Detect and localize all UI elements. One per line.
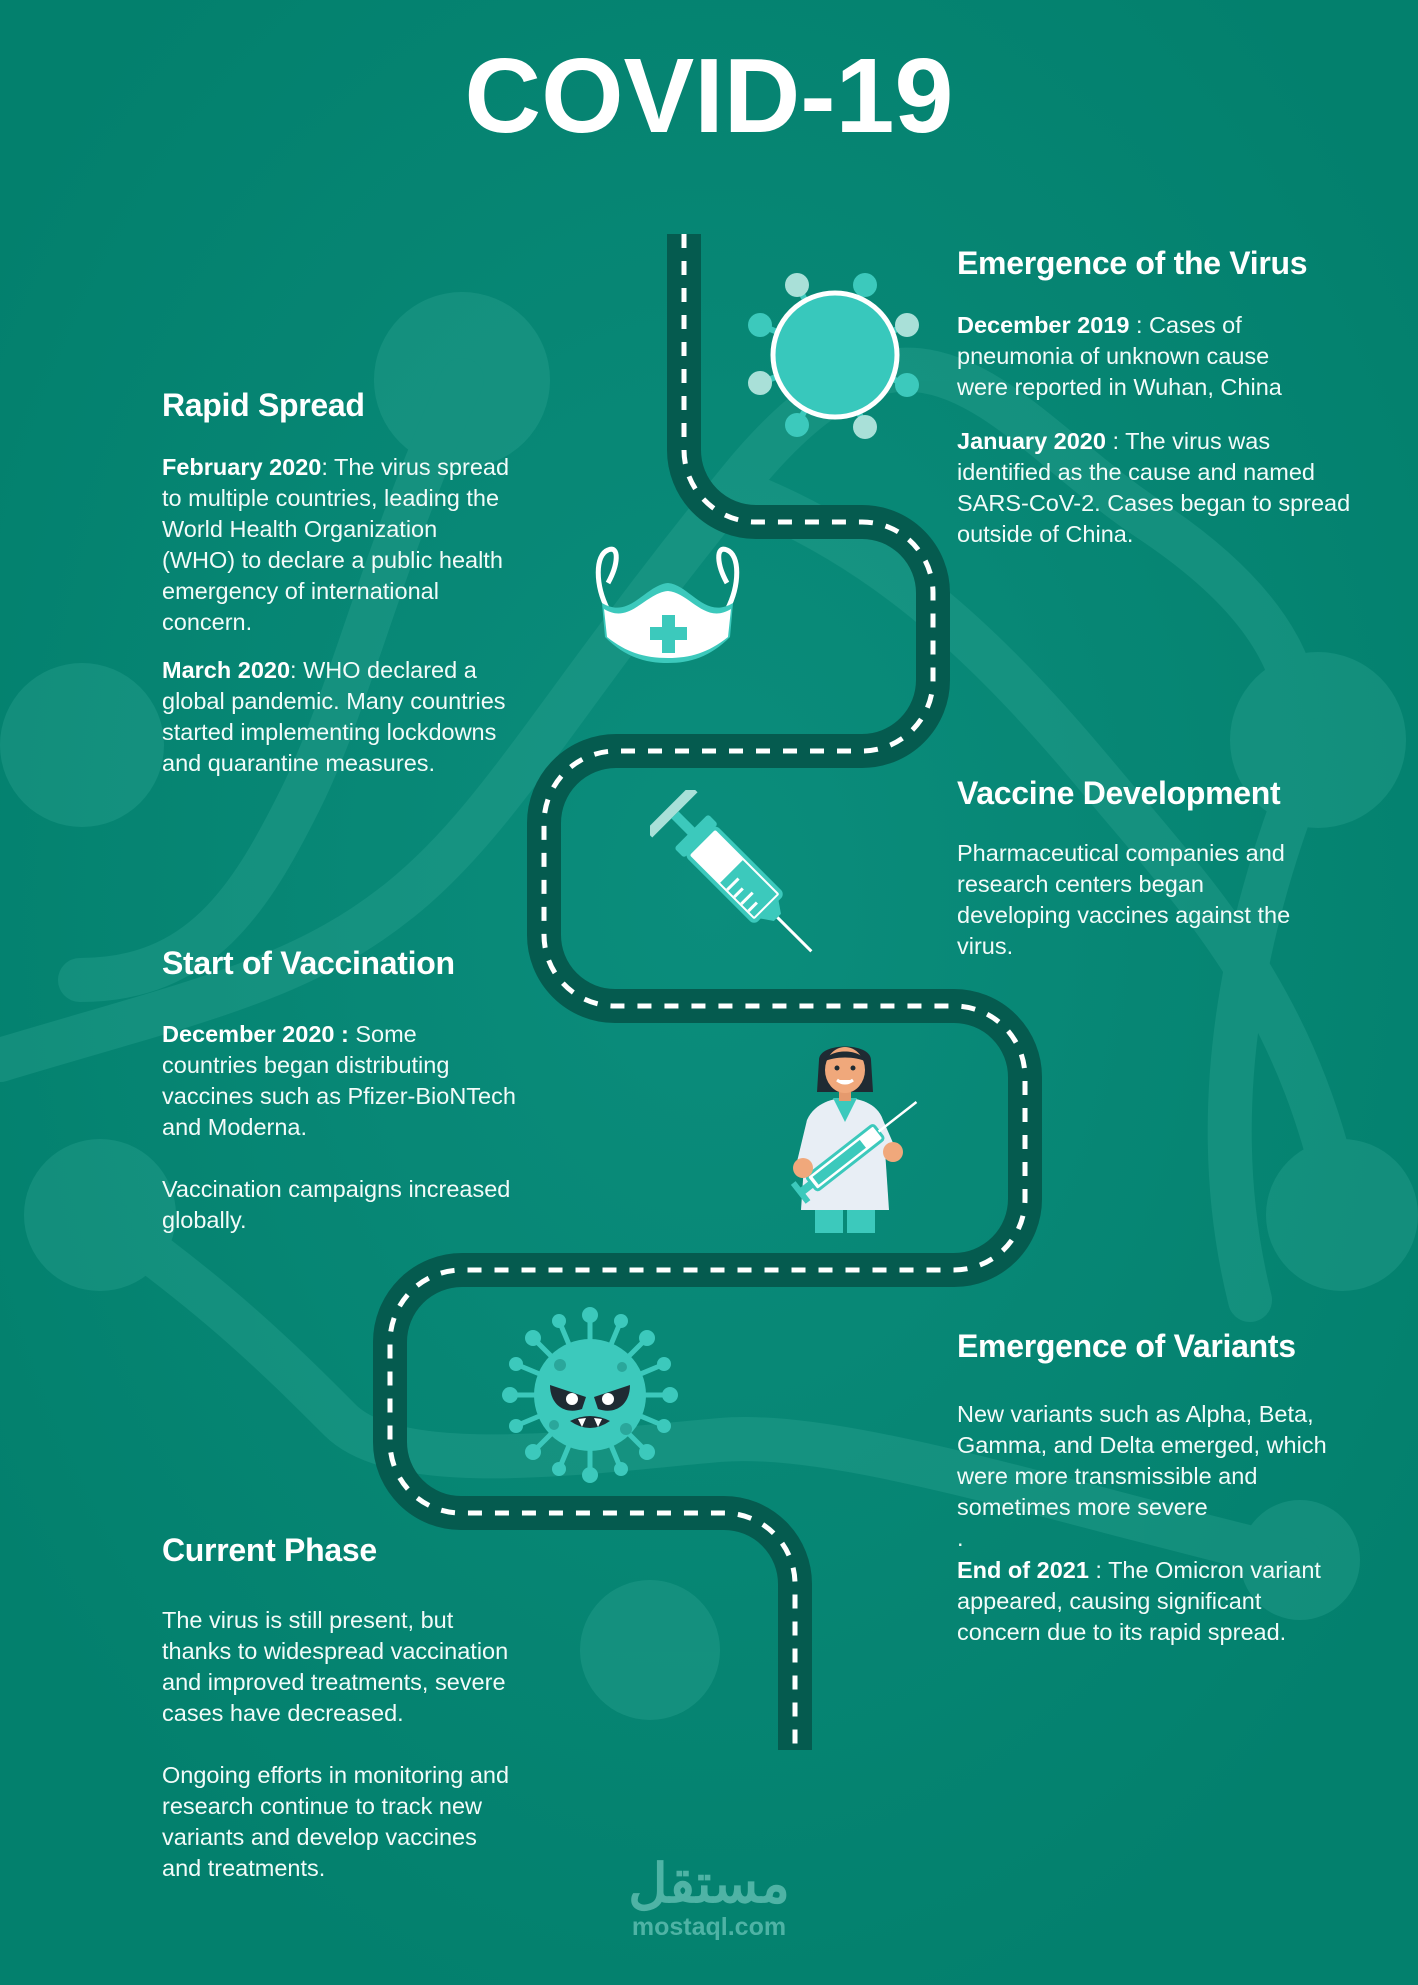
text: End of 2021 <box>957 1557 1321 1645</box>
icon: mask <box>596 546 740 663</box>
text: vaccine development: Pharmaceutical companies and <box>957 840 1285 866</box>
text: current phase: cases have decreased. <box>162 1700 404 1726</box>
text: current phase: thanks to widespread vaccination <box>162 1638 508 1664</box>
text: January 2020: outside of China. <box>957 521 1133 547</box>
text: February 2020: February 2020: The virus spread <box>162 454 509 480</box>
heading: Start of Vaccination: Start of Vaccination <box>162 945 455 981</box>
text: vaccine development <box>957 840 1290 959</box>
text: vaccine development: virus. <box>957 933 1013 959</box>
text: February 2020: emergency of international <box>162 578 439 604</box>
text: January 2020: identified as the cause and named <box>957 459 1315 485</box>
text: variants: Gamma, and Delta emerged, which <box>957 1432 1327 1458</box>
heading: Rapid Spread: Rapid Spread <box>162 387 365 423</box>
text: variants: sometimes more severe <box>957 1494 1208 1520</box>
text: current phase: and treatments. <box>162 1855 325 1881</box>
title: COVID-19 <box>465 37 953 155</box>
text: current phase: research continue to track new <box>162 1793 482 1819</box>
text: December 2020: Vaccination campaigns increased <box>162 1176 510 1202</box>
text: December 2020: vaccines such as Pfizer-BioNTech <box>162 1083 516 1109</box>
heading: Vaccine Development: Vaccine Development <box>957 775 1280 811</box>
logo: mostaql <box>628 1854 790 1941</box>
text: End of 2021: concern due to its rapid spread. <box>957 1619 1286 1645</box>
text: December 2019 <box>957 312 1282 400</box>
text: variants: were more transmissible and <box>957 1463 1257 1489</box>
text: vaccine development: developing vaccines against the <box>957 902 1290 928</box>
text: December 2019: pneumonia of unknown cause <box>957 343 1269 369</box>
text: current phase: variants and develop vaccines <box>162 1824 477 1850</box>
text: current phase: Ongoing efforts in monitoring and <box>162 1762 509 1788</box>
icon: syringe <box>650 790 812 952</box>
heading: Emergence of Variants: Emergence of Variants <box>957 1328 1296 1364</box>
text: December 2020: countries began distributing <box>162 1052 449 1078</box>
text: March 2020: started implementing lockdowns <box>162 719 496 745</box>
icon: angry virus <box>502 1307 678 1483</box>
text: variants: New variants such as Alpha, Beta, <box>957 1401 1314 1427</box>
text: March 2020: March 2020: WHO declared a <box>162 657 477 683</box>
icon: doctor with syringe <box>791 1046 918 1233</box>
text: January 2020 <box>957 428 1350 547</box>
heading: Emergence of the Virus: Emergence of the Virus <box>957 245 1307 281</box>
text: December 2019: December 2019 : Cases of <box>957 312 1242 338</box>
text: February 2020: (WHO) to declare a public health <box>162 547 503 573</box>
text: January 2020: SARS-CoV-2. Cases began to spread <box>957 490 1350 516</box>
logo: mostaql: mostaql.com <box>632 1913 786 1941</box>
text: December 2020: and Moderna. <box>162 1114 307 1140</box>
icon: virus <box>748 273 919 439</box>
text: End of 2021: appeared, causing significant <box>957 1588 1261 1614</box>
text: February 2020 <box>162 454 509 635</box>
heading: Current Phase: Current Phase <box>162 1532 377 1568</box>
text: February 2020: World Health Organization <box>162 516 437 542</box>
text: variants <box>957 1401 1327 1551</box>
text: December 2020: globally. <box>162 1207 246 1233</box>
text: December 2020: December 2020 : Some <box>162 1021 417 1047</box>
text: January 2020: January 2020 : The virus was <box>957 428 1270 454</box>
text: March 2020: global pandemic. Many countries <box>162 688 506 714</box>
text: December 2019: were reported in Wuhan, China <box>957 374 1282 400</box>
text: February 2020: concern. <box>162 609 252 635</box>
text: vaccine development: research centers began <box>957 871 1204 897</box>
text: December 2020 <box>162 1021 516 1233</box>
text: current phase: and improved treatments, severe <box>162 1669 506 1695</box>
text: variants: . <box>957 1525 964 1551</box>
text: End of 2021: End of 2021 : The Omicron variant <box>957 1557 1321 1583</box>
text: March 2020 <box>162 657 506 776</box>
logo: mostaql: مستقل <box>628 1854 790 1914</box>
text: March 2020: and quarantine measures. <box>162 750 435 776</box>
road <box>390 234 1025 1750</box>
text: current phase <box>162 1607 509 1881</box>
text: current phase: The virus is still present, but <box>162 1607 453 1633</box>
text: February 2020: to multiple countries, leading the <box>162 485 499 511</box>
